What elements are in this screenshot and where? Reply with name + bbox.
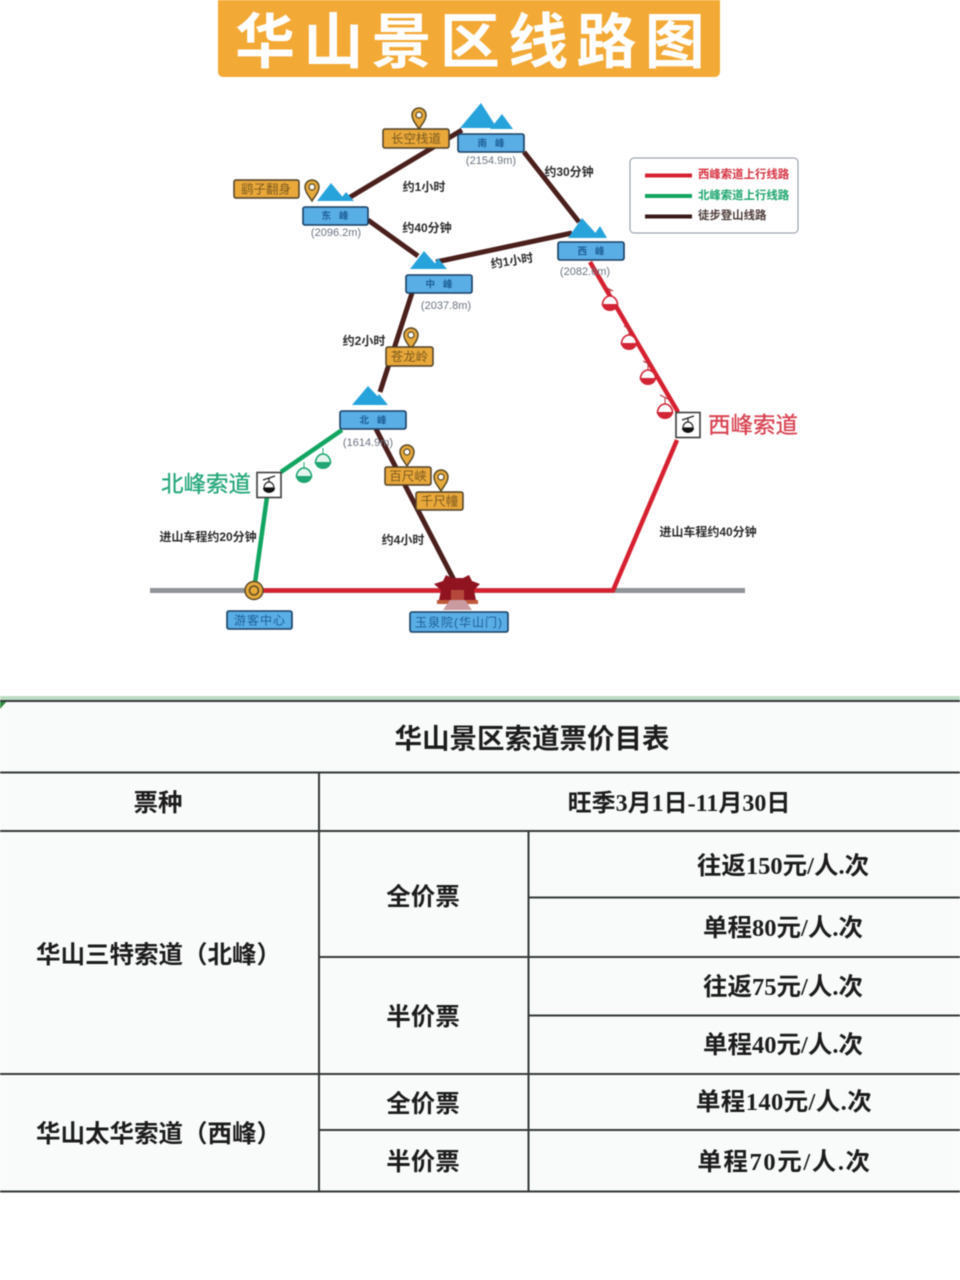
- column header: ticket type: 票种: [134, 789, 182, 817]
- ticket type labels: 半价票: [386, 1003, 460, 1031]
- scenic spot: 长空栈道: [383, 108, 449, 148]
- price values: 单程80元/人.次: [703, 914, 863, 942]
- route: hiking brown lines: [347, 130, 579, 580]
- duration labels: 进山车程约40分钟: [659, 524, 757, 539]
- duration labels: 约40分钟: [402, 220, 452, 235]
- gondolas: west cable: [602, 287, 673, 419]
- route: north peak cable car green line: [254, 430, 342, 590]
- price values: 单程140元/人.次: [696, 1088, 872, 1116]
- scenic spot: 百尺峡: [385, 445, 431, 485]
- temple: Yuquan Yuan: 玉泉院(华山门): [415, 614, 503, 630]
- ticket type labels: [386, 883, 460, 1176]
- title banner: 华山景区线路图: [235, 9, 713, 76]
- scenic spot: 千尺幢: [416, 470, 463, 510]
- price values: 往返75元/人.次: [703, 973, 863, 1001]
- peak: west: [558, 218, 624, 278]
- cable station: west peak: 西峰索道: [708, 413, 798, 438]
- road: grey base line: [150, 588, 745, 593]
- peak: central: 中 峰: [426, 278, 453, 290]
- peak: east: [303, 183, 368, 239]
- table title: 华山景区索道票价目表: [394, 723, 670, 754]
- price values: 单程70元/人.次: [697, 1148, 872, 1176]
- row label: north peak: 华山三特索道（北峰）: [36, 941, 281, 969]
- duration labels: [159, 164, 757, 547]
- cable station: north peak: 北峰索道: [161, 472, 251, 497]
- scenic spot: 苍龙岭: [386, 328, 433, 366]
- peak: east: (2096.2m): [311, 227, 361, 239]
- duration labels: 约1小时: [490, 250, 534, 271]
- duration labels: 进山车程约20分钟: [159, 529, 257, 544]
- visitor center: [227, 582, 292, 629]
- gondolas: north cable: [296, 448, 331, 483]
- duration labels: 约2小时: [343, 333, 385, 348]
- peak: north: 北 峰: [360, 414, 387, 426]
- legend: [630, 158, 798, 233]
- peak: north: [340, 386, 406, 449]
- scenic spot: 鹞子翻身: 鹞子翻身: [241, 182, 291, 196]
- temple: Yuquan Yuan: [410, 575, 508, 632]
- peak: west: 西 峰: [578, 246, 605, 258]
- peak: west: (2082.6m): [560, 266, 610, 278]
- scenic spot: 千尺幢: 千尺幢: [421, 494, 459, 508]
- table background: [0, 700, 960, 1192]
- route map: [150, 103, 798, 632]
- peak: central: [406, 251, 472, 312]
- price values: [696, 852, 872, 1176]
- visitor center: 游客中心: [234, 612, 286, 628]
- price values: 单程40元/人.次: [703, 1031, 863, 1059]
- legend: 北峰索道上行线路: [698, 188, 790, 202]
- ticket type labels: 全价票: [386, 1090, 460, 1118]
- legend: 西峰索道上行线路: [698, 167, 790, 181]
- legend: 徒步登山线路: [698, 208, 767, 222]
- column header: peak season: 旺季3月1日-11月30日: [568, 790, 790, 817]
- ticket type labels: 全价票: [386, 883, 460, 911]
- row label: west peak: 华山太华索道（西峰）: [36, 1120, 281, 1148]
- duration labels: 约4小时: [382, 532, 424, 547]
- duration labels: 约30分钟: [544, 164, 594, 179]
- peak: south: (2154.9m): [466, 155, 516, 167]
- peak: south: 南 峰: [478, 138, 505, 150]
- table grid: [0, 701, 960, 1192]
- ticket type labels: 半价票: [386, 1148, 460, 1176]
- route: west peak cable car red line: [256, 262, 678, 590]
- peak: north: (1614.9m): [343, 437, 393, 449]
- price table: [0, 696, 960, 1192]
- peak: central: (2037.8m): [421, 300, 471, 312]
- scenic spot: 苍龙岭: 苍龙岭: [391, 350, 428, 364]
- peak: south: [458, 103, 524, 167]
- scenic spot: 百尺峡: 百尺峡: [389, 470, 427, 484]
- scenic spot: 鹞子翻身: [234, 180, 319, 201]
- scenic spot: 长空栈道: 长空栈道: [391, 131, 441, 146]
- duration labels: 约1小时: [403, 179, 445, 194]
- peak: east: 东 峰: [322, 210, 349, 222]
- price values: 往返150元/人.次: [697, 852, 869, 880]
